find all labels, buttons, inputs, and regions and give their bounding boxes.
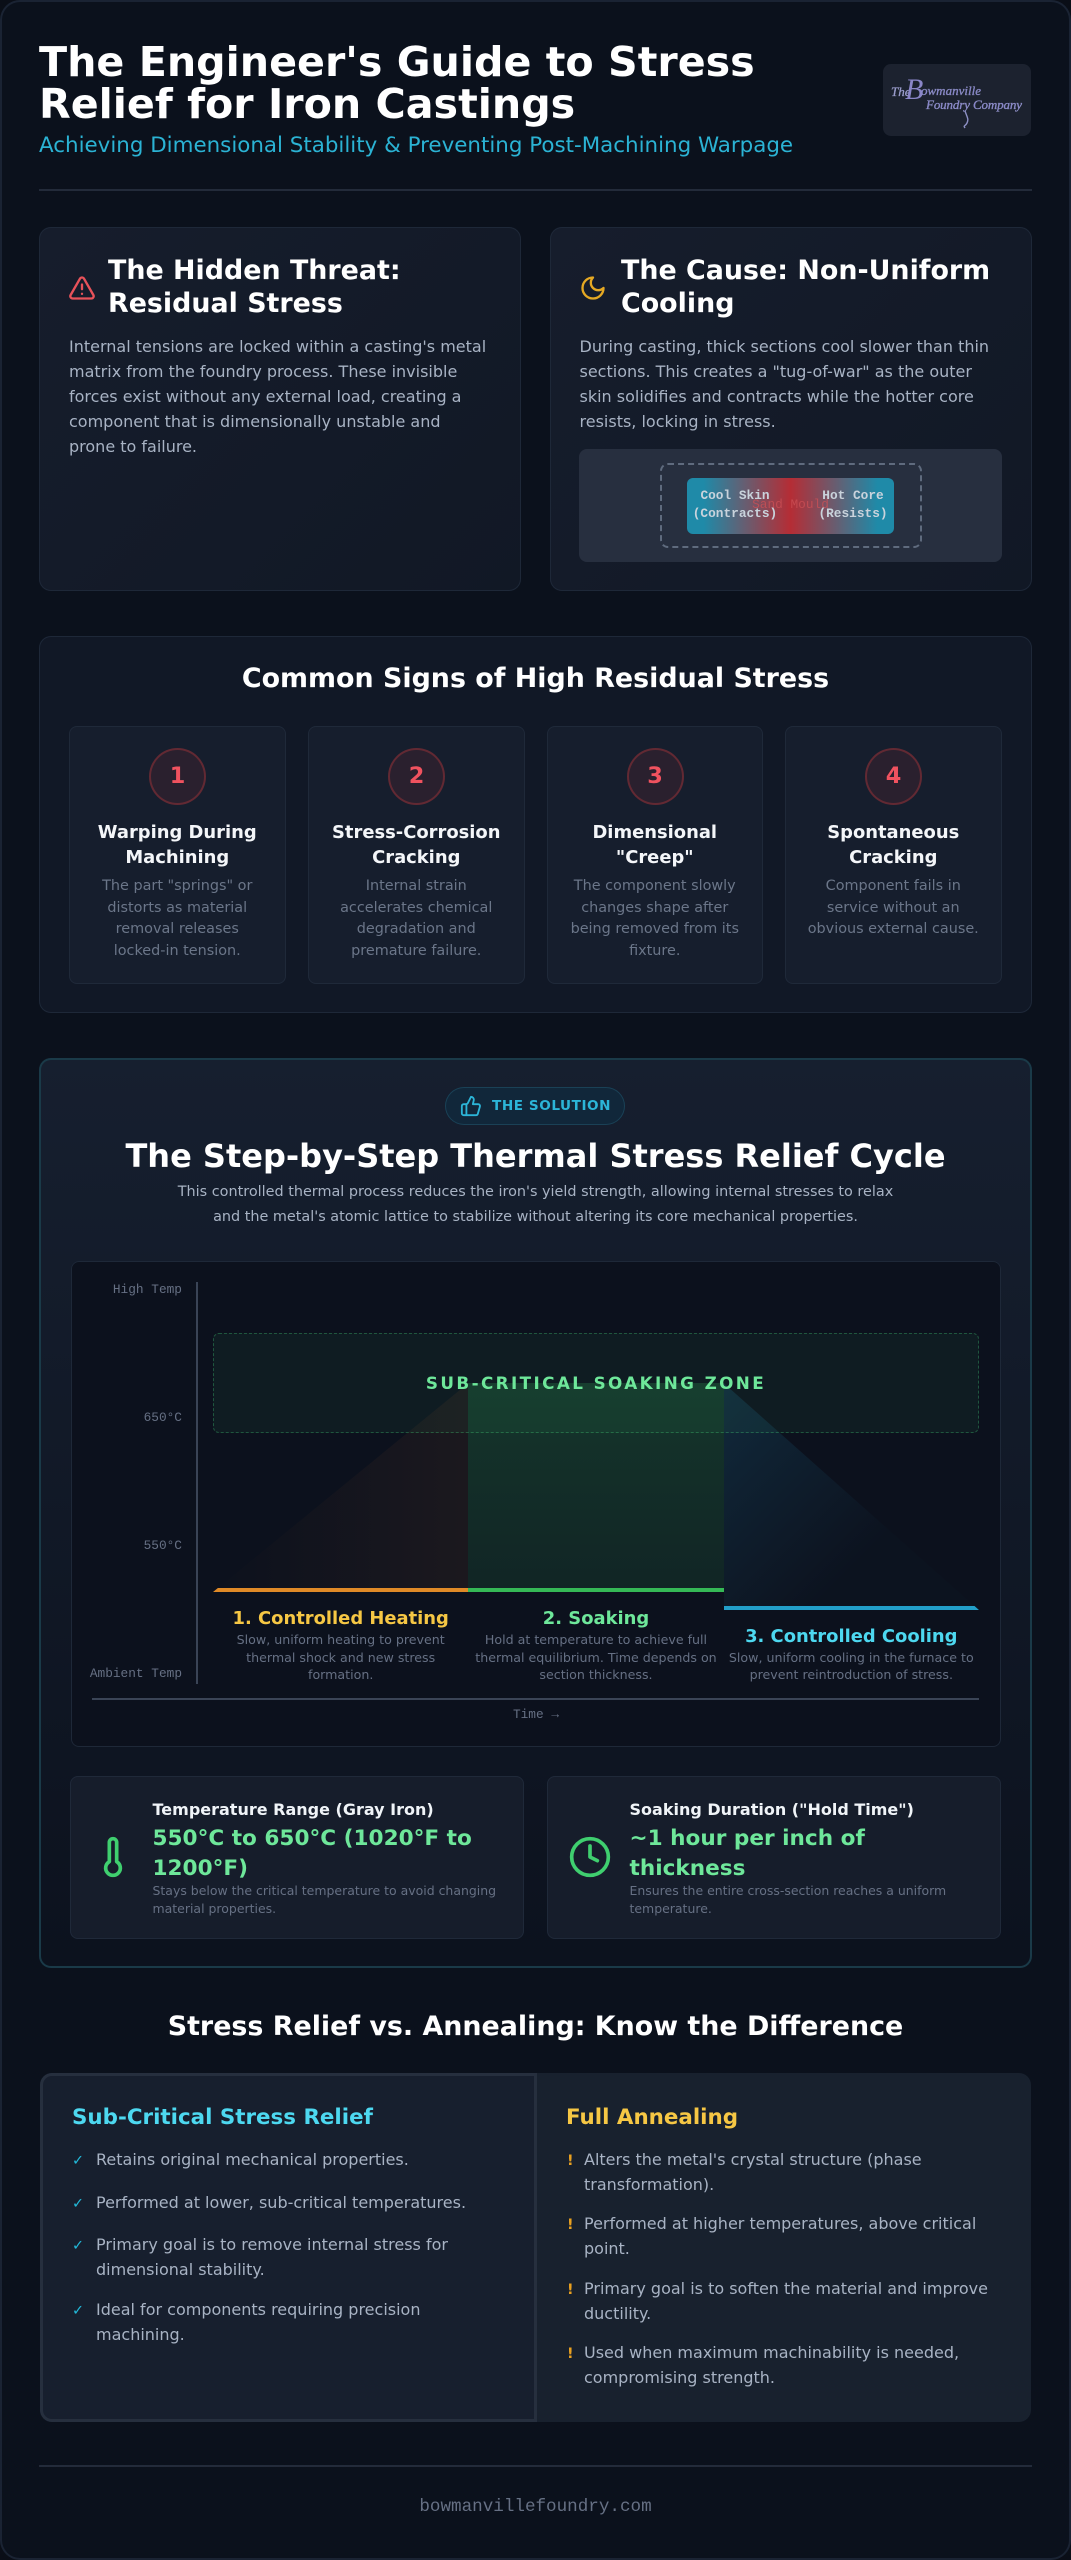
heading: Residual Stress xyxy=(108,288,343,318)
heading: The Step-by-Step Thermal Stress Relief Cycle xyxy=(125,1137,946,1175)
info card: temperature range xyxy=(70,1776,524,1939)
item 4: Ideal for components requiring precision xyxy=(96,2300,420,2318)
casting gradient xyxy=(687,478,894,534)
number 1 xyxy=(149,748,206,805)
cooling title: 3. Controlled Cooling xyxy=(745,1626,958,1646)
check 1: ✓ xyxy=(72,2153,84,2169)
item 2 xyxy=(584,2214,976,2258)
x axis label: Time → xyxy=(513,1707,559,1722)
panel: comparison xyxy=(40,2073,1031,2422)
number 3 xyxy=(626,748,684,805)
heating title: 1. Controlled Heating xyxy=(233,1608,449,1628)
cooling description: Slow, uniform cooling in the furnace to xyxy=(729,1650,974,1664)
sign title xyxy=(592,822,717,868)
panel: the solution xyxy=(39,1058,1032,1968)
sign title xyxy=(827,822,959,868)
item 2: Performed at lower, sub-critical temperatures. xyxy=(96,2192,466,2212)
heading: Cooling xyxy=(621,288,734,318)
label: hot core: (Resists) xyxy=(818,506,888,521)
info card: soaking duration xyxy=(547,1776,1001,1939)
info description: Ensures the entire cross-section reaches a uniform xyxy=(630,1882,946,1898)
soaking description: Hold at temperature to achieve full xyxy=(485,1632,707,1647)
intro text xyxy=(178,1184,893,1225)
check 2: ✓ xyxy=(72,2196,84,2212)
body text: During casting, thick sections cool slower than thin xyxy=(580,337,989,356)
heating description: Slow, uniform heating to prevent xyxy=(237,1632,445,1647)
sand mould outline xyxy=(660,463,922,548)
label: hot core xyxy=(818,488,888,521)
info value xyxy=(152,1826,472,1880)
header xyxy=(39,38,1032,191)
sign description: accelerates chemical xyxy=(340,900,492,916)
sign title: "Creep" xyxy=(616,847,694,868)
cooling description xyxy=(729,1650,974,1682)
number 2: 2 xyxy=(409,763,424,789)
body text: resists, locking in stress. xyxy=(580,412,776,431)
heading xyxy=(621,255,990,318)
column: full annealing xyxy=(537,2073,1031,2422)
check 4: ✓ xyxy=(72,2303,84,2319)
body text: component that is dimensionally unstable and xyxy=(69,412,441,431)
sign title: Stress-Corrosion xyxy=(332,822,500,843)
item 4: machining. xyxy=(96,2324,185,2344)
sign description xyxy=(102,878,252,958)
badge text: THE SOLUTION xyxy=(492,1098,611,1114)
item 4: Used when maximum machinability is needed, xyxy=(584,2342,959,2362)
soaking description xyxy=(475,1632,717,1682)
body text: prone to failure. xyxy=(69,437,197,456)
diagram: casting cross-section xyxy=(579,449,1002,562)
item 3 xyxy=(96,2234,448,2278)
label: hot core: Hot Core xyxy=(822,488,884,503)
item 2: Performed at higher temperatures, above critical xyxy=(584,2214,976,2232)
title: Relief for Iron Castings xyxy=(39,80,575,128)
soaking title: 2. Soaking xyxy=(543,1608,649,1628)
info value: thickness xyxy=(630,1856,745,1880)
icon: moon xyxy=(581,276,605,300)
sign description xyxy=(571,878,739,958)
sign description: changes shape after xyxy=(581,900,728,916)
number 3: 3 xyxy=(647,763,663,789)
sign description xyxy=(808,878,979,937)
info description: temperature. xyxy=(630,1900,712,1916)
title: The Engineer's Guide to Stress xyxy=(39,38,755,86)
body text: sections. This creates a "tug-of-war" as the outer xyxy=(580,362,972,381)
info value: ~1 hour per inch of xyxy=(630,1826,865,1851)
item 3: dimensional stability. xyxy=(96,2260,265,2278)
column heading: Full Annealing xyxy=(566,2105,738,2130)
sign title xyxy=(98,822,257,868)
warning 1: ! xyxy=(567,2153,574,2169)
label: cool skin xyxy=(693,488,777,521)
sign description xyxy=(340,878,492,958)
sign description: Component fails in xyxy=(826,878,961,894)
info title: Temperature Range (Gray Iron) xyxy=(152,1800,434,1819)
item 4 xyxy=(96,2300,420,2344)
sign description: obvious external cause. xyxy=(808,921,979,937)
sign description: locked-in tension. xyxy=(114,942,241,958)
sign 3 xyxy=(546,726,763,984)
panel: the hidden threat xyxy=(39,227,521,591)
heating description xyxy=(237,1632,445,1682)
body text: forces exist without any external load, creating a xyxy=(69,387,461,406)
warning 4: ! xyxy=(567,2346,574,2362)
phase: soaking xyxy=(468,1383,724,1592)
phase: cooling ramp xyxy=(724,1383,979,1610)
item 1: Alters the metal's crystal structure (phase xyxy=(584,2150,922,2168)
sign description: The component slowly xyxy=(574,878,736,894)
sign description: premature failure. xyxy=(351,942,481,958)
number 4 xyxy=(865,748,922,805)
sign description: service without an xyxy=(827,900,960,916)
logo: Bowmanville Foundry Company: The xyxy=(891,84,911,99)
body text xyxy=(69,337,486,456)
title xyxy=(39,38,755,128)
heating description: thermal shock and new stress xyxy=(246,1650,435,1665)
body text: Internal tensions are locked within a casting's metal xyxy=(69,337,486,356)
sign description: distorts as material xyxy=(107,900,247,916)
heading: The Hidden Threat: xyxy=(108,255,401,286)
sign title xyxy=(332,822,500,868)
sign 2 xyxy=(308,726,524,984)
y axis xyxy=(196,1282,198,1684)
sign title: Cracking xyxy=(372,847,460,868)
info title: Soaking Duration ("Hold Time") xyxy=(630,1800,914,1819)
sign description: removal releases xyxy=(116,921,239,937)
intro text: and the metal's atomic lattice to stabilize without altering its core mechanical properties. xyxy=(213,1209,858,1225)
sign title: Warping During xyxy=(98,822,257,843)
info description xyxy=(152,1882,496,1916)
body text: skin solidifies and contracts while the hotter core xyxy=(580,387,974,406)
body text: matrix from the foundry process. These invisible xyxy=(69,362,457,381)
item 1: transformation). xyxy=(584,2174,714,2194)
info description: Stays below the critical temperature to avoid changing xyxy=(152,1882,496,1898)
comparison heading: Stress Relief vs. Annealing: Know the Difference xyxy=(168,2011,903,2042)
logo: Bowmanville Foundry Company: B xyxy=(905,73,923,106)
warning 2: ! xyxy=(567,2217,574,2233)
sign description: Internal strain xyxy=(366,878,467,894)
intro text: This controlled thermal process reduces the iron's yield strength, allowing internal stresses to relax xyxy=(178,1184,893,1200)
item 1: Retains original mechanical properties. xyxy=(96,2150,409,2168)
logo: Bowmanville Foundry Company: owmanville xyxy=(921,83,981,98)
label: sand mould: Sand Mould xyxy=(752,497,829,512)
info description xyxy=(630,1882,946,1916)
subtitle: Achieving Dimensional Stability & Preventing Post-Machining Warpage xyxy=(39,133,793,158)
item 3: ductility. xyxy=(584,2304,651,2322)
sign description: being removed from its xyxy=(571,921,739,937)
footer url: bowmanvillefoundry.com xyxy=(419,2497,652,2517)
info value: 550°C to 650°C (1020°F to xyxy=(152,1826,472,1851)
sign 4 xyxy=(785,726,1002,984)
phase: heating ramp xyxy=(213,1383,468,1592)
logo: Bowmanville Foundry Company xyxy=(883,64,1031,136)
soaking description: section thickness. xyxy=(539,1667,653,1682)
sign title: Machining xyxy=(125,847,229,868)
item 4 xyxy=(584,2342,959,2386)
sub-critical zone xyxy=(213,1333,979,1433)
badge: the solution xyxy=(445,1087,625,1125)
panel: common signs xyxy=(39,636,1032,1013)
sign title: Cracking xyxy=(849,847,937,868)
sign description: fixture. xyxy=(629,942,680,958)
icon: thumbs up xyxy=(460,1096,481,1116)
item 3: Primary goal is to remove internal stress for xyxy=(96,2234,448,2254)
heading xyxy=(108,255,401,318)
item 2: point. xyxy=(584,2238,630,2258)
y label high temp: High Temp xyxy=(113,1282,182,1297)
sign 1 xyxy=(69,726,286,984)
item 4: compromising strength. xyxy=(584,2368,775,2386)
info value xyxy=(630,1826,866,1880)
label: cool skin: Cool Skin xyxy=(700,488,770,503)
x axis xyxy=(92,1698,979,1700)
icon: warning triangle xyxy=(69,276,95,300)
column: sub-critical stress relief xyxy=(40,2073,537,2422)
heating description: formation. xyxy=(308,1667,373,1682)
icon: thermometer xyxy=(104,1836,122,1878)
icon: clock xyxy=(570,1836,610,1878)
sign description: The part "springs" or xyxy=(102,878,252,894)
y label 650: 650°C xyxy=(144,1410,182,1425)
number 1: 1 xyxy=(170,763,185,789)
heading: The Cause: Non-Uniform xyxy=(621,255,990,286)
y label ambient: Ambient Temp xyxy=(90,1666,182,1681)
column heading: Sub-Critical Stress Relief xyxy=(72,2105,373,2130)
chart: thermal cycle xyxy=(71,1261,1001,1747)
header divider xyxy=(39,189,1032,191)
check 3: ✓ xyxy=(72,2238,84,2254)
item 1 xyxy=(584,2150,922,2194)
heading: Common Signs of High Residual Stress xyxy=(242,663,829,694)
y label 550: 550°C xyxy=(144,1538,182,1553)
sign description: degradation and xyxy=(357,921,476,937)
item 3 xyxy=(584,2278,988,2322)
soaking description: thermal equilibrium. Time depends on xyxy=(475,1650,717,1665)
warning 3: ! xyxy=(567,2282,574,2298)
info value: 1200°F) xyxy=(152,1856,248,1880)
panel: the cause xyxy=(550,227,1032,591)
cooling description: prevent reintroduction of stress. xyxy=(750,1667,953,1682)
number 2 xyxy=(388,748,445,805)
sign title: Spontaneous xyxy=(827,822,959,843)
logo: Bowmanville Foundry Company: Foundry Company xyxy=(925,97,1022,112)
body text xyxy=(580,337,989,431)
info description: material properties. xyxy=(152,1900,276,1916)
sign title: Dimensional xyxy=(592,822,717,843)
zone label: SUB-CRITICAL SOAKING ZONE xyxy=(426,1373,766,1393)
footer divider xyxy=(39,2465,1032,2467)
item 3: Primary goal is to soften the material and improve xyxy=(584,2278,988,2298)
label: cool skin: (Contracts) xyxy=(693,506,777,521)
number 4: 4 xyxy=(886,763,901,789)
